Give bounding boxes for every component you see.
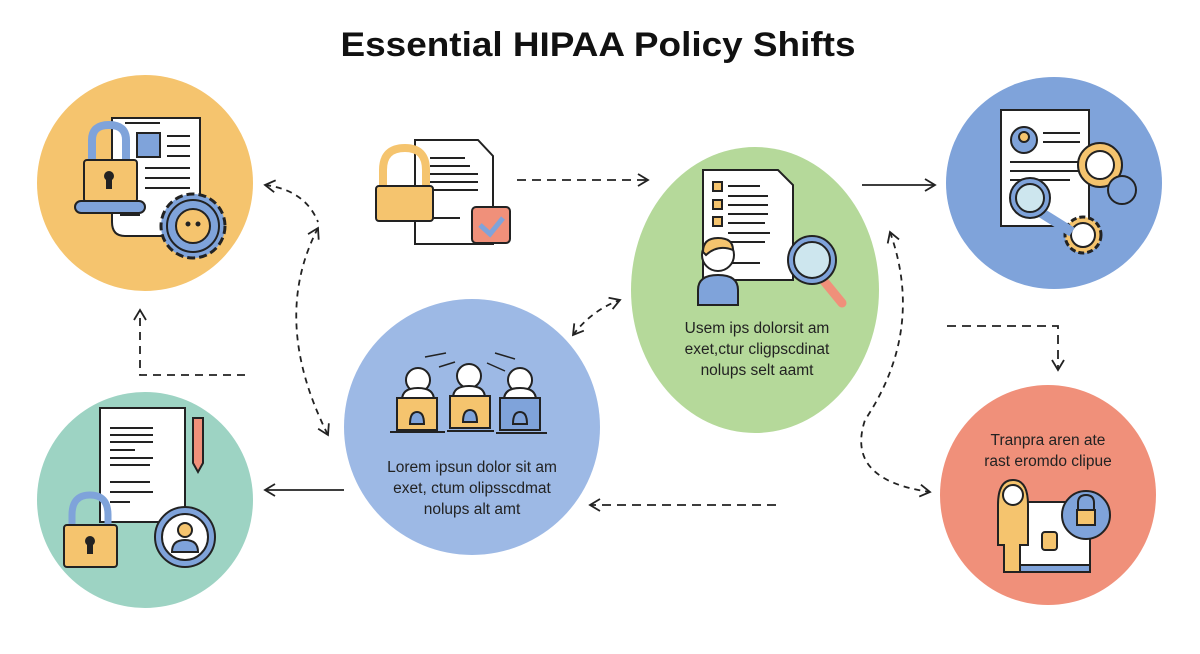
- arrow: salmon to blue: [590, 504, 776, 506]
- arrows: [140, 180, 1058, 505]
- arrow: green to blue top-right: [862, 184, 935, 186]
- arrow: blue to teal: [265, 489, 344, 491]
- text block: rast eromdo clipue: [984, 453, 1112, 470]
- text block: Tranpra aren ate: [991, 432, 1105, 449]
- text block: nolups selt aamt: [701, 362, 814, 379]
- arrow: curved orange: [265, 185, 318, 222]
- text block: Usem ips dolorsit am: [685, 320, 829, 337]
- icon: lock: [75, 125, 145, 213]
- icon: lock document with shield: [376, 140, 510, 244]
- icon: document: [100, 408, 203, 522]
- icon: gear: [161, 194, 225, 258]
- icon: user badge: [155, 507, 215, 567]
- icon: profile doc with magnifier and gears: [1001, 110, 1136, 253]
- icon: person with lock screen: [998, 480, 1110, 572]
- panel: blue top-right: [946, 77, 1162, 289]
- text block: exet,ctur cligpscdinat: [685, 341, 830, 358]
- arrow: to salmon: [947, 326, 1058, 370]
- icon: document: [112, 118, 200, 236]
- panel: salmon transparency: [940, 385, 1156, 605]
- panel: teal document lock: [37, 392, 253, 608]
- panel: orange lock & gear: [37, 75, 253, 291]
- icon: people: [390, 353, 547, 433]
- text block: exet, ctum olipsscdmat: [393, 480, 552, 497]
- panel: green review: [631, 147, 879, 433]
- icon: lock: [64, 495, 117, 567]
- icon: checklist doc: [698, 170, 842, 305]
- arrow: lock doc to green: [517, 179, 648, 181]
- panel: blue people: [344, 299, 600, 555]
- arrow: teal up to orange: [140, 310, 245, 375]
- arrow: green-blue: [573, 300, 620, 335]
- text block: Lorem ipsun dolor sit am: [387, 459, 557, 476]
- arrow: curved right: [861, 232, 930, 492]
- text block: nolups alt amt: [424, 501, 521, 518]
- title: Essential HIPAA Policy Shifts: [340, 26, 856, 64]
